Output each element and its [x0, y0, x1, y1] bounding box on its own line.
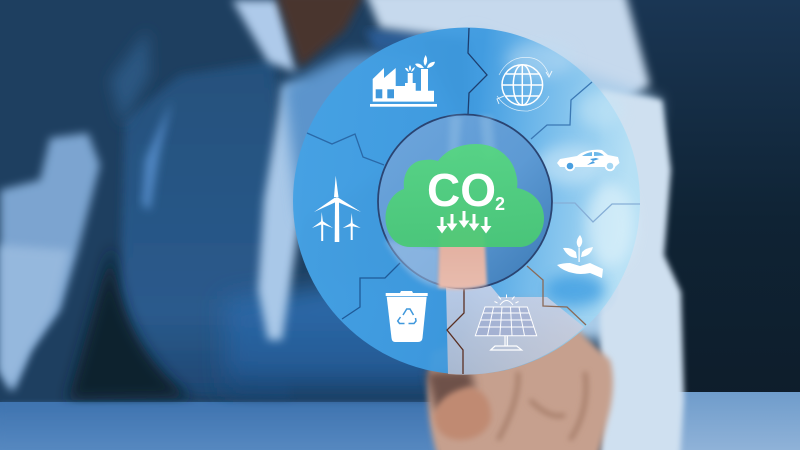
- palm and fingers: [428, 297, 613, 450]
- shirt behind right of disc: [470, 30, 660, 340]
- down arrows: [436, 211, 492, 234]
- icon: wind turbines: [312, 176, 361, 242]
- pale glass over hand: [446, 285, 584, 375]
- knuckle creases: [498, 372, 586, 440]
- shirt torso, dark left side: [120, 60, 290, 398]
- solar cells: [475, 307, 537, 336]
- CO2 cloud: 2: [495, 194, 505, 214]
- fingertip through inner ring: [438, 200, 487, 289]
- table edge reinforcement: [0, 404, 430, 450]
- right sleeve: [600, 90, 684, 450]
- shadow beside thumb: [426, 370, 475, 412]
- icon: hand holding plant: [557, 235, 603, 278]
- left sleeve: [0, 133, 100, 392]
- thumb: [434, 387, 491, 440]
- collar and right shoulder: [365, 0, 650, 110]
- dark shadow under arm: [68, 245, 190, 400]
- shirt folds: [142, 100, 172, 210]
- side strip of shirt left of disc: [258, 85, 310, 340]
- inner ring: [378, 114, 552, 288]
- table surface: [0, 392, 800, 450]
- icon: factory: [370, 55, 437, 107]
- left collar: [232, 0, 296, 72]
- glass disc: [293, 28, 640, 375]
- lit left lower ring: [385, 240, 440, 287]
- lower shirt under disc: [225, 270, 450, 396]
- icon: recycling bin: [386, 291, 428, 342]
- upper shirt: [283, 50, 470, 220]
- icon: globe with arrows: [497, 57, 552, 111]
- hand pointing: [426, 297, 613, 450]
- cloud shape: [385, 144, 544, 247]
- icon: solar panel: [475, 294, 537, 350]
- light patches on right of disc: [506, 42, 634, 306]
- neck: [275, 0, 365, 68]
- icon: electric car: [557, 150, 620, 170]
- dark notch right of neck: [365, 30, 425, 55]
- segment seams: [307, 28, 640, 374]
- vertical shirt stripes in ring: [448, 116, 496, 160]
- CO2 label: CO: [427, 164, 496, 216]
- CO2 cloud: [385, 144, 544, 247]
